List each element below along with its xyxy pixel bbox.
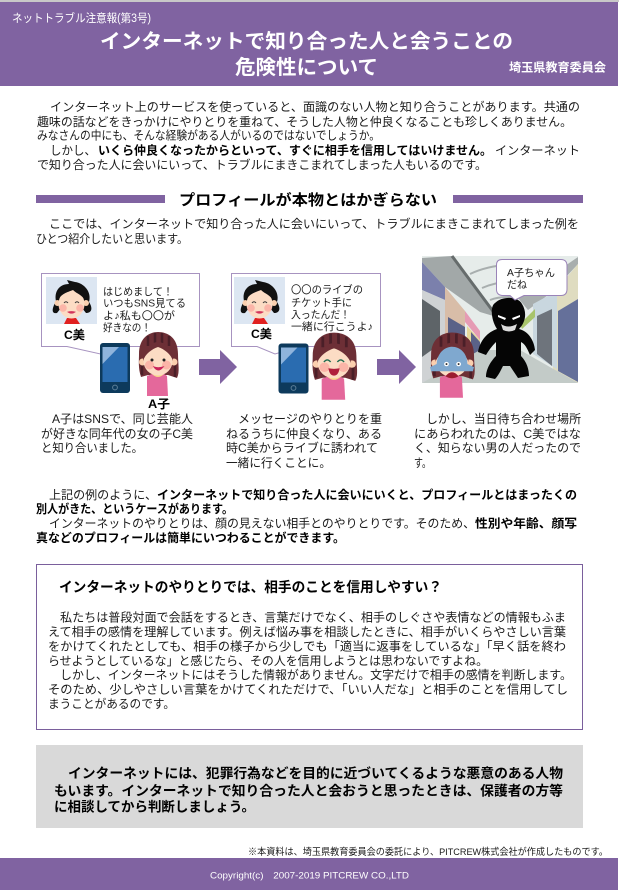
- panel: trust explanation: [36, 564, 582, 730]
- caption: step 1: [41, 412, 193, 455]
- intro text: [37, 99, 580, 172]
- icon: black figure: [478, 298, 535, 379]
- icon: A子 frightened: [430, 332, 475, 398]
- intro text: みなさんの中にも、そんな経験がある人がいるのではないでしょうか。: [37, 128, 380, 142]
- intro text: いくら仲良くなったからといって、すぐに相手を信用してはいけません。: [98, 142, 492, 158]
- callout: [36, 745, 583, 828]
- caption: step 1: と知り合いました。: [41, 441, 143, 455]
- panel heading: インターネットのやりとりでは、相手のことを信用しやすい？: [59, 579, 442, 595]
- caption: step 1: が好きな同年代の女の子C美: [41, 426, 193, 441]
- speech bubble: [232, 274, 380, 354]
- callout: もいます。インターネットで知り合った人と会おうと思ったときは、保護者の方等: [54, 782, 563, 798]
- section heading: [36, 191, 583, 209]
- bubble text: [103, 286, 186, 334]
- bubble text: はじめまして！: [103, 286, 173, 298]
- C美 label: C美: [64, 327, 85, 342]
- caption: step 2: メッセージのやりとりを重: [238, 412, 382, 426]
- intro text: インターネット上のサービスを使っていると、面識のない人物と知り合うことがあります。共通の: [50, 99, 580, 114]
- title: 危険性について: [235, 55, 378, 79]
- panel body: らせようとしているな」と感じたら、その人を信用しようとは思わないですよね。: [48, 653, 488, 668]
- bubble text: 好きなの！: [103, 321, 151, 334]
- caption: step 3: にあらわれたのは、C美ではな: [414, 427, 581, 441]
- panel body: をかけてくれたとしても、相手の様子から少しでも「適当に返事をしているな」「早く話を終わ: [48, 638, 566, 654]
- summary text: 上記の例のように、: [49, 488, 157, 502]
- title: [100, 30, 513, 79]
- caption: step 1: A子はSNSで、同じ芸能人: [52, 412, 193, 426]
- bubble text: いつもSNS見てる: [103, 298, 186, 310]
- summary text: インターネットで知り合った人に会いにいくと、プロフィールとはまったくの: [157, 487, 577, 502]
- arrow: [199, 350, 237, 384]
- bubble text: 一緒に行こうよ♪: [291, 320, 373, 333]
- caption: step 2: 一緒に行くことに。: [226, 456, 331, 470]
- bubble text: チケット手に: [291, 296, 352, 309]
- bubble text: よ♪私も〇〇が: [103, 309, 176, 322]
- speech bubble: [496, 260, 567, 300]
- C美 label: C美: [251, 326, 272, 341]
- panel: step 1: [42, 274, 200, 411]
- icon: A子: [139, 332, 179, 396]
- section intro: ひとつ紹介したいと思います。: [36, 232, 188, 246]
- intro text: インターネット: [495, 144, 580, 158]
- callout: インターネットには、犯罪行為などを目的に近づいてくるような悪意のある人物: [68, 765, 564, 781]
- summary text: [36, 487, 577, 545]
- bubble text: 〇〇のライブの: [291, 283, 363, 296]
- bubble text: [291, 283, 373, 333]
- panel body: えて相手の感情を理解しています。例えば悩み事を相談したときに、相手がいくらやさしい言葉: [48, 624, 566, 639]
- speech bubble: A子ちゃん: [507, 267, 555, 279]
- panel: step 2: [232, 274, 380, 400]
- credit note: ※本資料は、埼玉県教育委員会の委託により、PITCREW株式会社が作成したものです。: [248, 846, 608, 858]
- panel body: 私たちは普段対面で会話をするとき、言葉だけでなく、相手のしぐさや表情などの情報もふま: [60, 610, 566, 624]
- caption: step 2: ねるうちに仲良くなり、ある: [226, 426, 382, 441]
- intro text: 趣味の話などをきっかけにやりとりを重ねて、そうした人物と仲良くなることも珍しくありません。: [37, 114, 572, 129]
- icon: C美 avatar: [46, 277, 97, 324]
- footer band: Copyright(c) 2007-2019 PITCREW CO.,LTD: [210, 870, 409, 882]
- caption: step 3: [414, 412, 581, 470]
- arcade scene: [422, 256, 578, 383]
- caption: step 3: く、知らない男の人だったので: [414, 441, 581, 455]
- footer band: [0, 858, 618, 890]
- summary text: インターネットのやりとりは、顔の見えない相手とのやりとりです。そのため、: [49, 516, 475, 530]
- icon: phone: [100, 343, 130, 393]
- summary text: 性別や年齢、顔写: [475, 516, 577, 530]
- panel: step 3: [422, 256, 578, 398]
- icon: A子 smiling: [313, 333, 357, 400]
- section heading: プロフィールが本物とはかぎらない: [179, 191, 437, 209]
- A子 label: A子: [148, 397, 170, 411]
- panel body: そのため、少しやさしい言葉をかけてくれただけで、「いい人だな」と相手のことを信用してし: [48, 682, 568, 696]
- intro text: で知り合った人に会いにいって、トラブルにまきこまれてしまった人もいるのです。: [37, 157, 487, 172]
- arrow: [377, 350, 416, 384]
- icon: phone: [278, 344, 308, 394]
- section intro: [36, 216, 579, 246]
- summary text: 別人がきた、というケースがあります。: [36, 501, 233, 516]
- callout: に相談してから判断しましょう。: [54, 798, 255, 814]
- intro text: しかし、: [50, 144, 96, 158]
- icon: C美 avatar: [234, 277, 285, 324]
- publisher: 埼玉県教育委員会: [509, 60, 606, 74]
- summary text: 真などのプロフィールは簡単にいつわることができます。: [36, 530, 345, 545]
- speech bubble: [42, 274, 200, 354]
- caption: step 3: す。: [414, 456, 431, 470]
- title: インターネットで知り合った人と会うことの: [100, 30, 513, 53]
- caption: step 3: しかし、当日待ち合わせ場所: [426, 412, 581, 426]
- speech bubble: だね: [507, 279, 527, 291]
- panel body: まうことがあるのです。: [48, 696, 175, 711]
- caption: step 2: 時C美からライブに誘われて: [226, 440, 378, 455]
- section intro: ここでは、インターネットで知り合った人に会いにいって、トラブルにまきこまれてしまった例を: [49, 216, 579, 231]
- header band: [0, 2, 618, 86]
- panel body: [48, 610, 572, 711]
- bubble text: 入ったんだ！: [291, 309, 350, 321]
- issue label: ネットトラブル注意報(第3号): [12, 11, 151, 25]
- panel body: しかし、インターネットにはそうした情報がありません。文字だけで相手の感情を判断します。: [60, 667, 572, 682]
- page edge: [0, 0, 619, 2]
- caption: step 2: [226, 412, 382, 470]
